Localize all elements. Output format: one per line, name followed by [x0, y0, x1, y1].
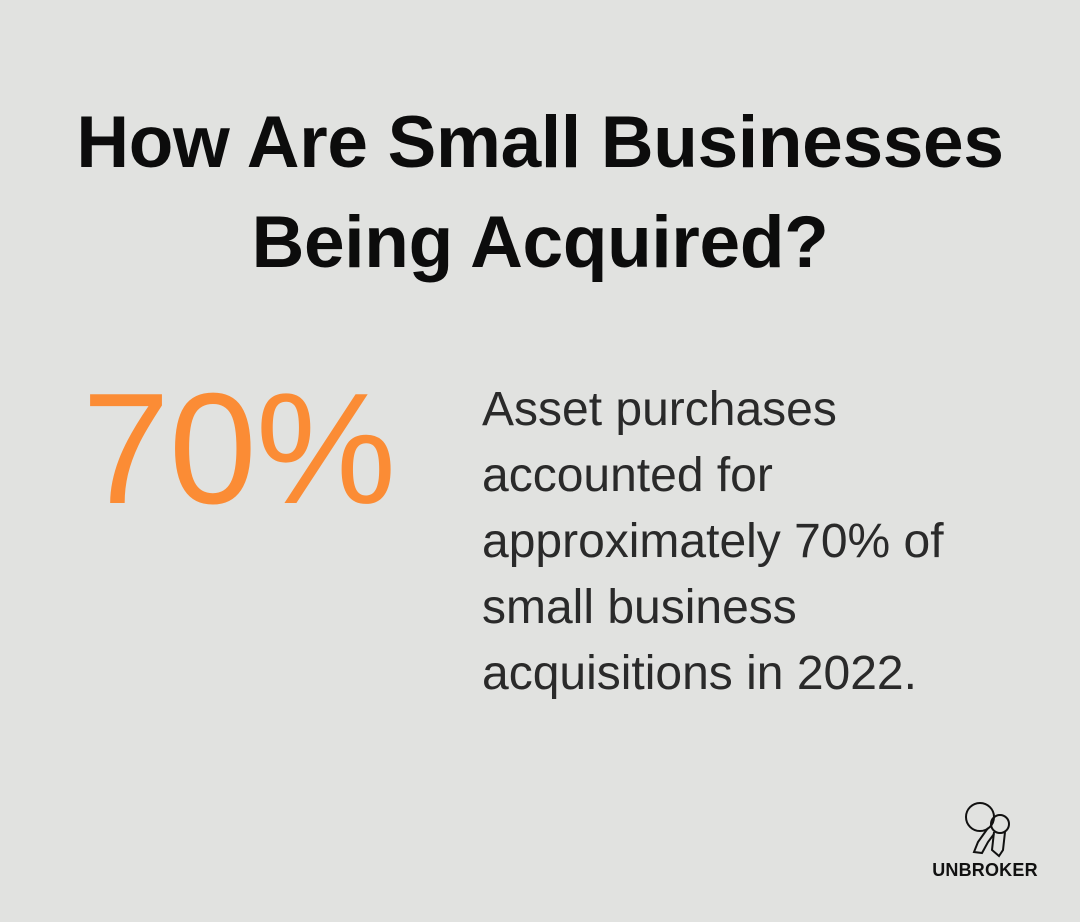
logo text: UNBROKER — [932, 860, 1038, 880]
text block: description: small business — [482, 581, 797, 634]
text block: description — [482, 383, 944, 700]
text block: description: Asset purchases — [482, 383, 837, 436]
icon: keys — [965, 802, 1010, 858]
title: How Are Small Businesses — [76, 102, 1004, 183]
title — [76, 102, 1004, 283]
text block: description: approximately 70% of — [482, 515, 944, 568]
text block: description: acquisitions in 2022. — [482, 647, 917, 700]
title: Being Acquired? — [252, 202, 828, 283]
logo: unbroker — [932, 802, 1038, 880]
stat: 70%: 70% — [82, 361, 395, 537]
text block: description: accounted for — [482, 449, 773, 502]
